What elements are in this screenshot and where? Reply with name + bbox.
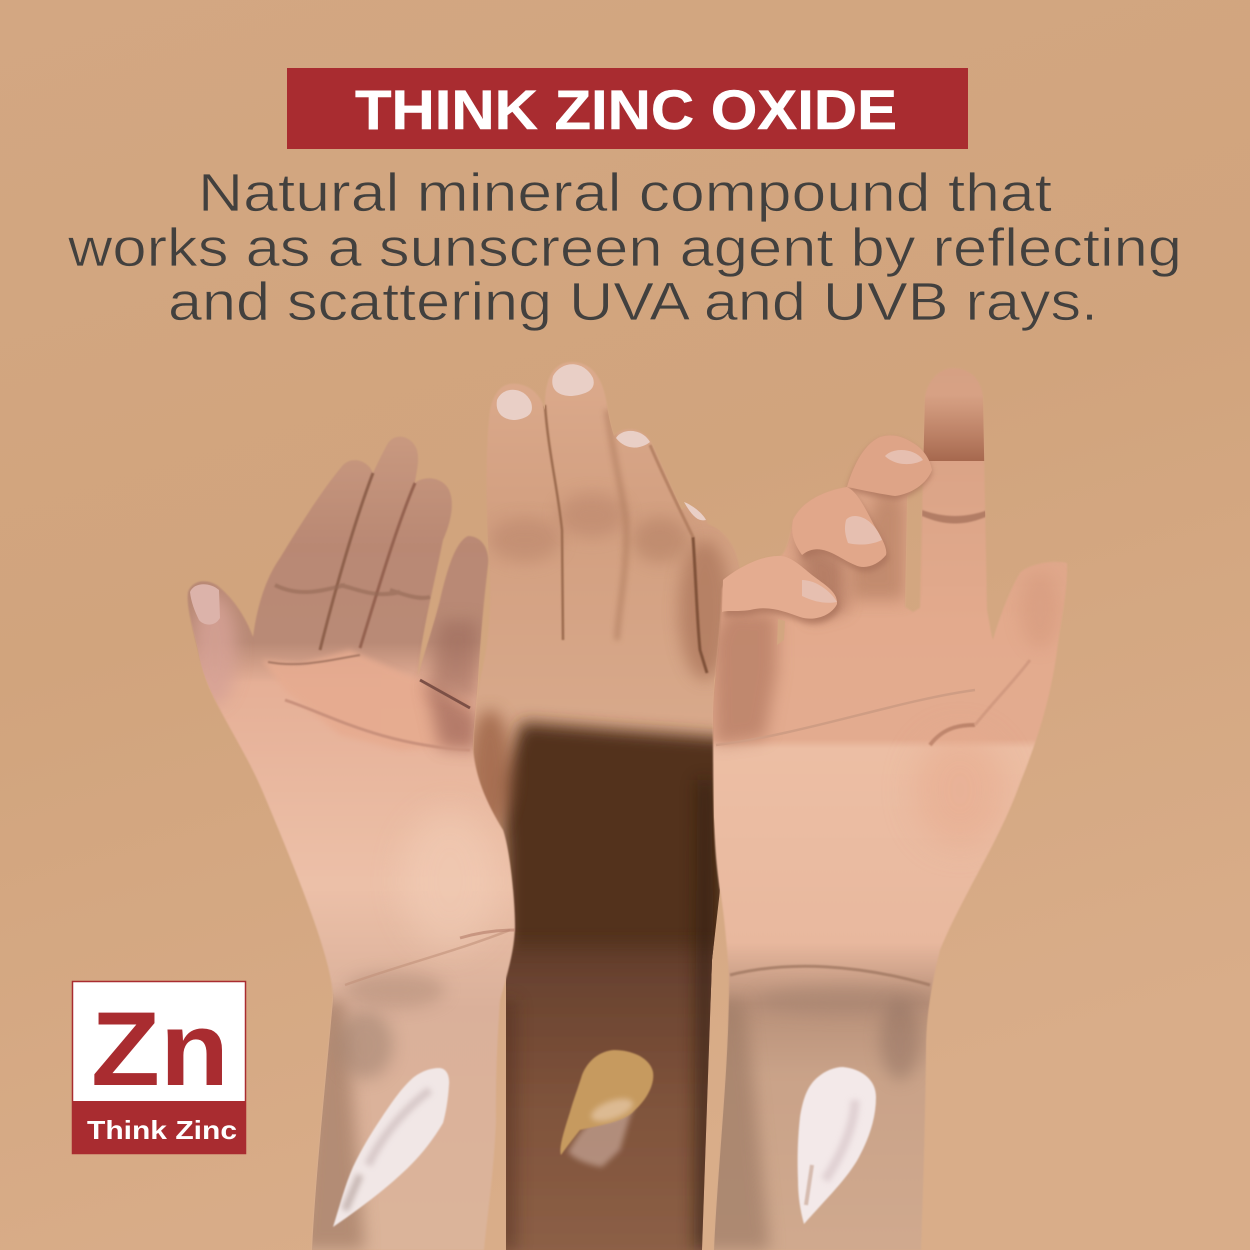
description text: and scattering UVA and UVB rays. xyxy=(168,272,1098,332)
left hand palm up xyxy=(188,437,515,1250)
nails middle hand xyxy=(497,364,706,520)
title banner: THINK ZINC OXIDE xyxy=(355,78,897,141)
foundation swatch on middle wrist xyxy=(560,1050,653,1167)
Zn logo: Think Zinc xyxy=(87,1115,237,1145)
title banner xyxy=(287,68,968,149)
Zn logo xyxy=(72,982,246,1154)
description text xyxy=(67,163,1182,332)
Zn logo: Zn xyxy=(91,991,229,1108)
description text: Natural mineral compound that xyxy=(198,163,1052,223)
middle hand with dark skin tone xyxy=(468,362,740,1250)
shadow across back of hand xyxy=(500,722,730,1000)
thumb nail left hand xyxy=(190,584,220,625)
curled fingers right hand xyxy=(722,436,932,624)
sunscreen swatch on right wrist xyxy=(798,1067,876,1224)
right hand palm up xyxy=(700,368,1067,1250)
description text: works as a sunscreen agent by reflecting xyxy=(67,218,1182,278)
sunscreen swatch on left wrist xyxy=(333,1068,449,1227)
background gap under curled fingers xyxy=(777,619,785,645)
nails right hand xyxy=(802,450,923,603)
